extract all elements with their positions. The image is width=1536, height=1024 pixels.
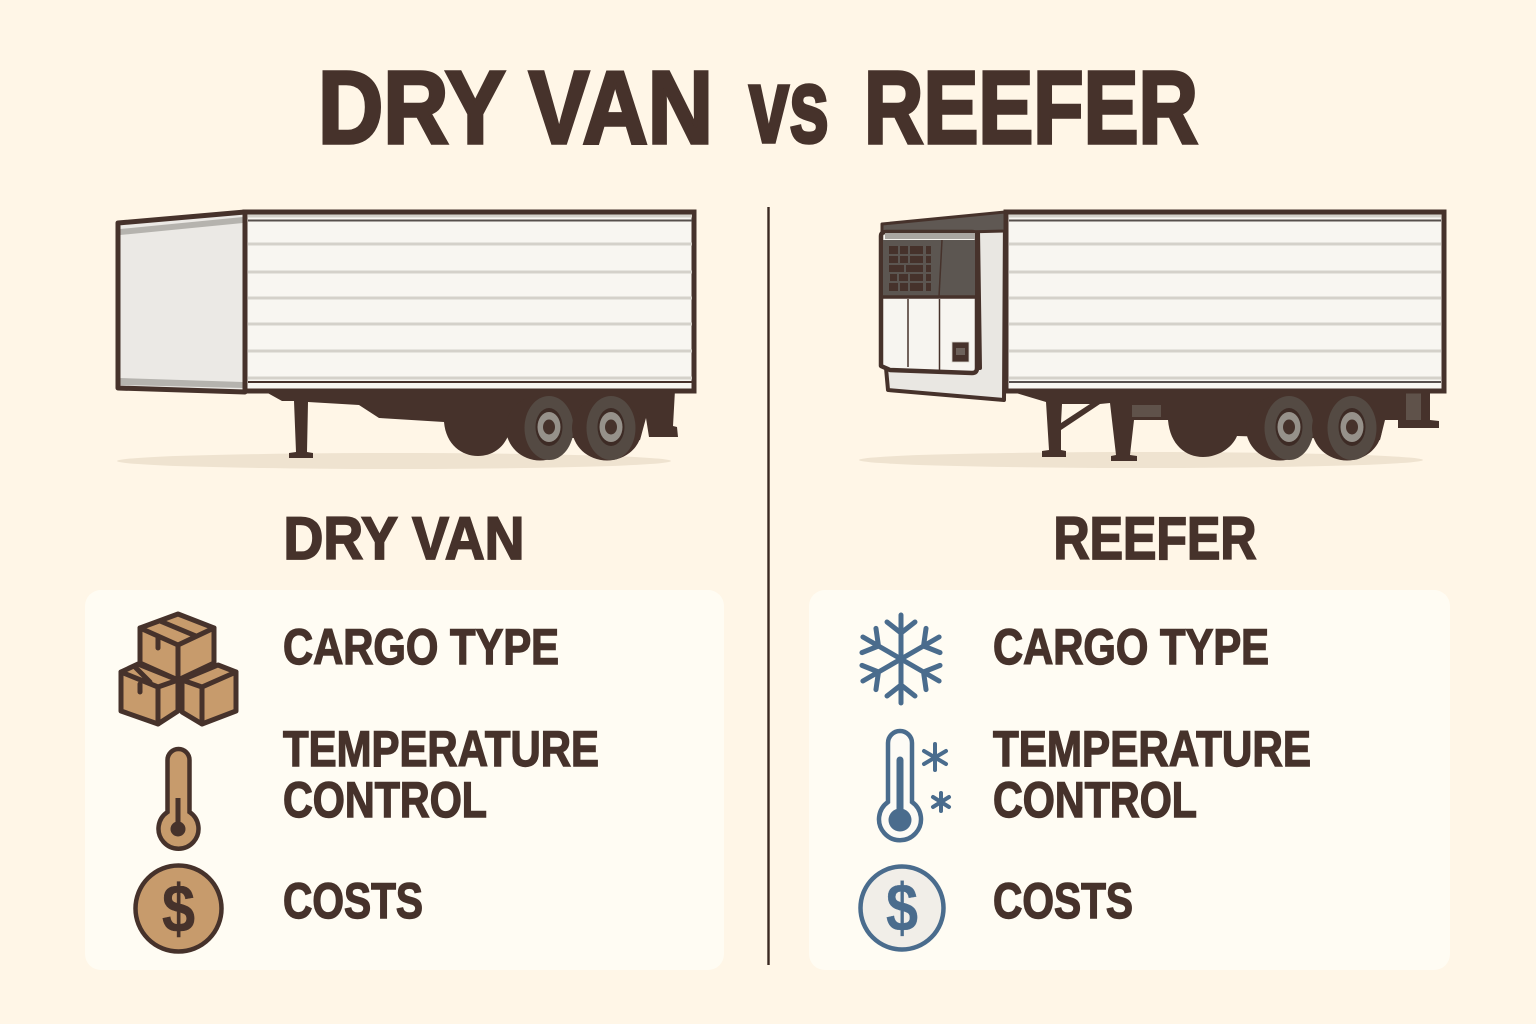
reefer chassis grey patches <box>1132 393 1421 420</box>
icon: cold asterisks <box>924 744 949 811</box>
title: vs <box>749 47 829 165</box>
panel: reefer features <box>809 590 1450 970</box>
icon: dollar coin <box>136 866 222 952</box>
icon: thermometer <box>158 749 198 849</box>
costs label: COSTS <box>993 873 1133 929</box>
dry van subtitle: DRY VAN <box>284 505 524 572</box>
icon: cold thermometer <box>879 731 949 840</box>
cargo type label: CARGO TYPE <box>993 619 1269 675</box>
dry van trailer <box>117 212 694 469</box>
reefer side panel <box>1006 212 1444 391</box>
dry van side panel <box>245 212 694 391</box>
title: REEFER <box>864 50 1198 165</box>
costs label: COSTS <box>283 873 423 929</box>
title: DRY VAN <box>318 50 713 165</box>
reefer roof cap <box>882 212 1005 234</box>
temperature control label <box>993 721 1311 828</box>
icon: dollar coin: $ <box>162 871 195 947</box>
panel: dry van features <box>85 590 724 970</box>
temperature control label: CONTROL <box>283 772 487 828</box>
dry van ground shadow <box>117 453 671 469</box>
reefer trailer <box>859 212 1444 468</box>
dry van chassis <box>264 390 678 458</box>
reefer chassis <box>1006 390 1439 461</box>
refrigeration unit <box>881 232 977 373</box>
reefer front wall <box>886 213 1005 400</box>
cargo type label: CARGO TYPE <box>283 619 559 675</box>
reefer subtitle: REEFER <box>1054 505 1256 572</box>
icon: blue dollar coin: $ <box>886 870 918 946</box>
temperature control label: TEMPERATURE <box>283 721 599 777</box>
temperature control label <box>283 721 599 828</box>
icon: cardboard boxes <box>121 614 236 724</box>
title <box>318 47 1198 165</box>
dry van front face <box>118 212 245 392</box>
temperature control label: CONTROL <box>993 772 1197 828</box>
center divider <box>767 207 770 965</box>
icon: blue dollar coin <box>860 866 944 950</box>
reefer ground shadow <box>859 452 1423 468</box>
icon: snowflake <box>856 615 946 703</box>
reefer wheels <box>1246 396 1382 460</box>
temperature control label: TEMPERATURE <box>993 721 1311 777</box>
dry van wheels <box>506 396 642 460</box>
reefer unit vent grille <box>889 246 931 291</box>
reefer unit control box <box>952 342 969 362</box>
